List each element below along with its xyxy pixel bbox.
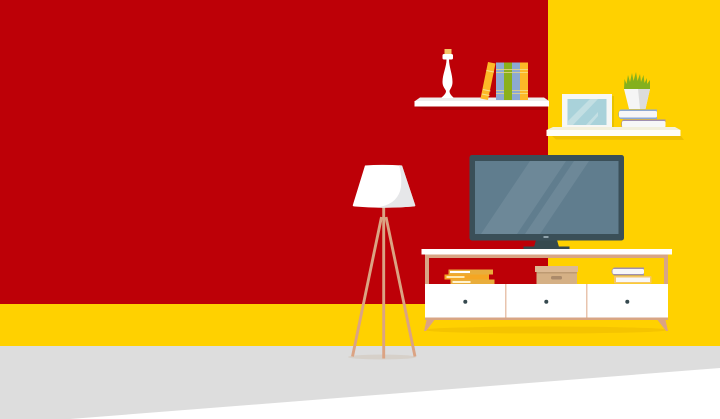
second blue book: [512, 62, 520, 100]
lamp tripod legs: [352, 207, 415, 358]
floor white wedge: [70, 368, 720, 419]
floor: [0, 346, 720, 419]
plant leaves: [624, 72, 650, 89]
stacked white books: [612, 268, 652, 284]
potted plant: [624, 72, 650, 109]
lower shelf with frame, plant and books: [546, 72, 684, 140]
drawers: [425, 284, 668, 318]
shelf shadow: [415, 106, 548, 110]
cabinet floor shadow: [424, 326, 668, 334]
cabinet top: [422, 249, 672, 254]
upper shelf board: [414, 98, 549, 106]
tv logo: [544, 236, 548, 238]
orange book: [520, 62, 528, 100]
media cabinet: [422, 249, 672, 334]
lower shelf shadow: [552, 136, 684, 140]
lower shelf board: [546, 127, 680, 136]
lamp floor shadow: [348, 354, 416, 360]
candle holder: [441, 49, 454, 98]
row of books: [480, 62, 528, 100]
plant pot: [624, 89, 650, 109]
drawer knobs: [463, 300, 629, 304]
tv bezel: [470, 155, 624, 240]
blue book: [496, 62, 504, 100]
tv screen: [475, 161, 618, 234]
tv stand: [524, 240, 570, 250]
stacked yellow books: [444, 270, 494, 284]
storage box: [535, 266, 578, 284]
picture frame: [562, 94, 614, 130]
screen glare narrow: [525, 161, 589, 234]
cabinet feet: [424, 318, 668, 331]
upper stacked book: [618, 110, 657, 119]
screen glare: [481, 161, 566, 234]
cabinet frame: [425, 254, 668, 320]
lamp shade: [353, 165, 415, 208]
green book: [504, 62, 512, 100]
floor lamp: [348, 165, 416, 360]
lower stacked book: [621, 120, 666, 129]
television: [470, 155, 624, 250]
background: red wall: [0, 0, 548, 304]
upper shelf with lamp and books: [414, 49, 549, 110]
leaning orange book: [480, 62, 496, 100]
